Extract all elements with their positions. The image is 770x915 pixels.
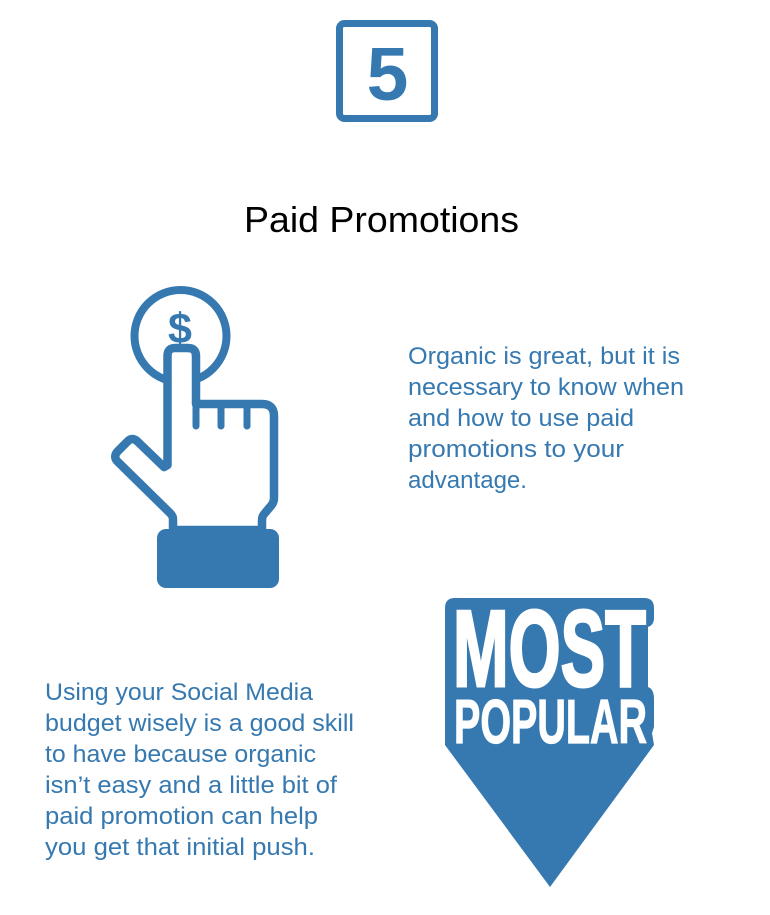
text block: organic advice: advantage. xyxy=(408,467,527,494)
text block: budget advice: Using your Social Media xyxy=(45,679,314,706)
text block: budget advice: to have because organic xyxy=(45,741,316,768)
number badge: 5 xyxy=(340,24,434,118)
text block: budget advice: you get that initial push. xyxy=(45,834,315,861)
text block: organic advice xyxy=(408,343,684,494)
number badge: 5: 5 xyxy=(367,32,408,116)
icon: hand pressing dollar coin: $ xyxy=(168,305,192,353)
title: Paid Promotions xyxy=(244,199,519,240)
text block: budget advice: paid promotion can help xyxy=(45,803,318,830)
text block: budget advice: isn’t easy and a little bit of xyxy=(45,772,337,799)
text block: budget advice: budget wisely is a good skill xyxy=(45,710,354,737)
badge: most popular arrow: MOST xyxy=(453,588,646,710)
badge: most popular arrow: POPULAR xyxy=(454,688,647,757)
text block: organic advice: promotions to your xyxy=(408,436,624,463)
text block: budget advice xyxy=(45,679,354,861)
badge: most popular arrow xyxy=(445,588,654,887)
icon: hand pressing dollar coin xyxy=(115,290,279,588)
text block: organic advice: and how to use paid xyxy=(408,405,634,432)
text block: organic advice: Organic is great, but it is xyxy=(408,343,680,370)
text block: organic advice: necessary to know when xyxy=(408,374,684,401)
